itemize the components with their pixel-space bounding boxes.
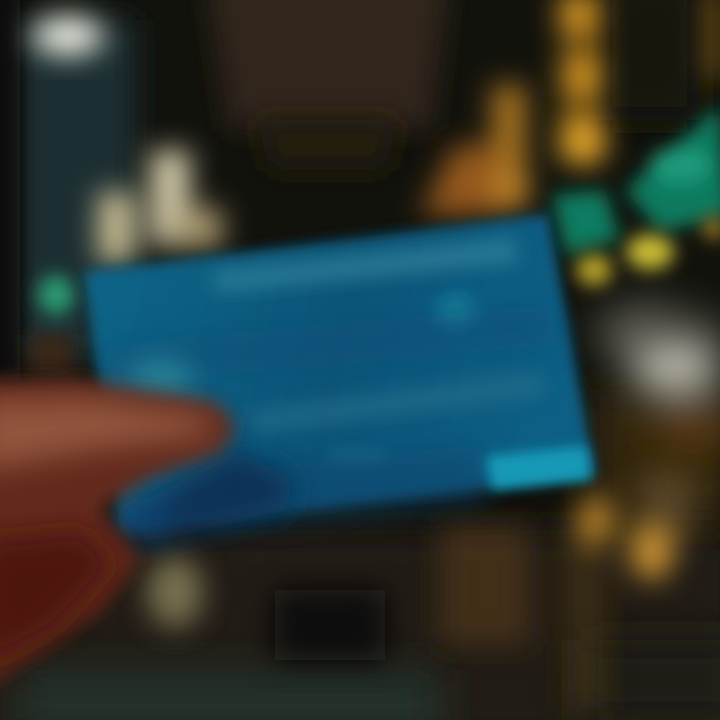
lights: floor reflections [147,470,695,710]
hand shadow on palm [0,530,115,670]
card heading text band [212,238,518,292]
lights: yellow bokeh spots [576,217,720,286]
bars: orange bokeh columns at right [420,0,720,215]
hand highlight on finger [0,398,210,470]
shape: card shadow corner near thumb [116,450,295,542]
card small text [326,448,390,464]
card chip glow [436,294,476,330]
shape: pale reflective object at right [590,300,720,444]
hand: reddish finger and thumb [0,378,236,690]
shape: green note at right [552,105,720,255]
card cyan button [486,446,592,490]
lights: white ceiling lamp [32,16,104,56]
bars: cream stacked coins at left [98,150,222,262]
card lower shade [200,445,490,526]
light: green glow at left [28,275,74,370]
card: blue bank card [84,214,595,530]
card darker midline [100,305,560,385]
card logo glow [126,360,194,396]
card number band [250,372,545,432]
